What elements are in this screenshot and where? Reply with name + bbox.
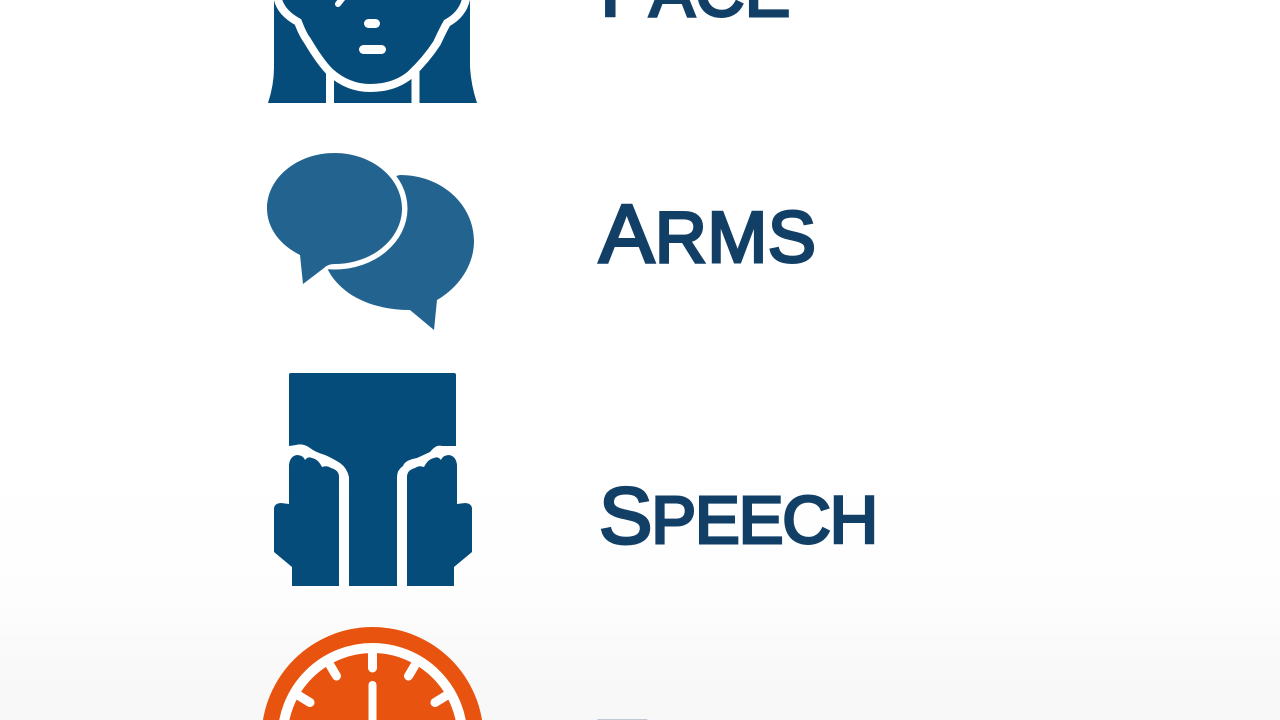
label: Speech: SPEECH (599, 471, 877, 560)
icon: stopwatch (262, 627, 484, 720)
label: Arms: ARMS (599, 187, 816, 280)
icon: face (268, 0, 477, 106)
icon: speech bubbles (262, 148, 474, 330)
icon: hands on a panel (274, 373, 472, 586)
